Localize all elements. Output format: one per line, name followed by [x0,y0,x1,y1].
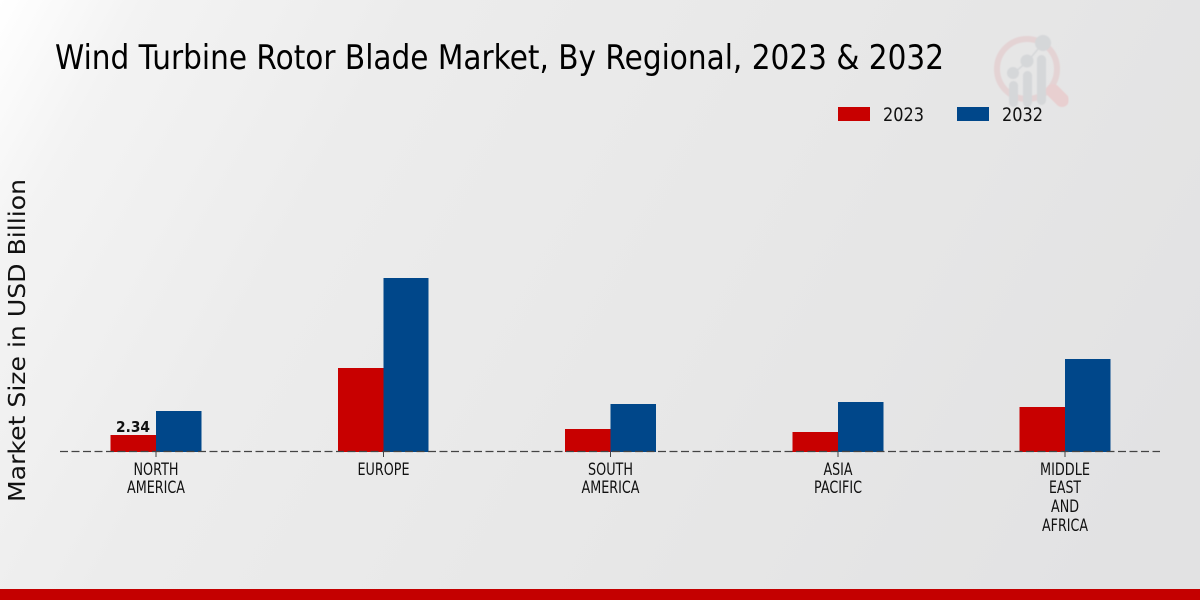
legend item: 2032: 2032 [1002,104,1043,126]
icon: watermark logo [997,35,1062,107]
category label: Asia Pacific: PACIFIC [814,478,862,497]
category label: Asia Pacific [814,460,862,497]
bars: Asia Pacific [792,402,884,452]
bars: Europe [338,278,428,452]
legend item: 2023: 2023 [883,104,924,126]
category label: Middle East and Africa: AND [1051,497,1079,516]
category label: Middle East and Africa [1040,460,1090,535]
category label: Middle East and Africa: EAST [1049,478,1082,497]
bars: Middle East and Africa [1020,359,1110,452]
bar chart [60,278,1160,457]
footer bar [0,589,1200,600]
category label: Middle East and Africa: AFRICA [1042,516,1089,535]
category label: North America: NORTH [134,460,178,479]
y-axis label: Market Size in USD Billion [5,179,31,502]
category label: Europe: EUROPE [358,460,410,479]
legend item: 2023 [838,104,924,126]
legend [838,104,1043,126]
category label: North America: AMERICA [127,478,186,497]
category label: South America: AMERICA [582,478,640,497]
category label: Middle East and Africa: MIDDLE [1040,460,1090,479]
title: Wind Turbine Rotor Blade Market, By Regional, 2023 & 2032 [55,38,944,78]
category label: South America: SOUTH [588,460,633,479]
category label: North America [127,460,186,497]
legend item: 2032 [957,104,1043,126]
bars: South America [565,404,656,452]
bars: North America [110,411,202,452]
category label: Asia Pacific: ASIA [824,460,853,479]
data label: 2.34: 2.34 [116,418,150,436]
category label: South America [582,460,640,497]
x-axis baseline [60,450,1160,452]
